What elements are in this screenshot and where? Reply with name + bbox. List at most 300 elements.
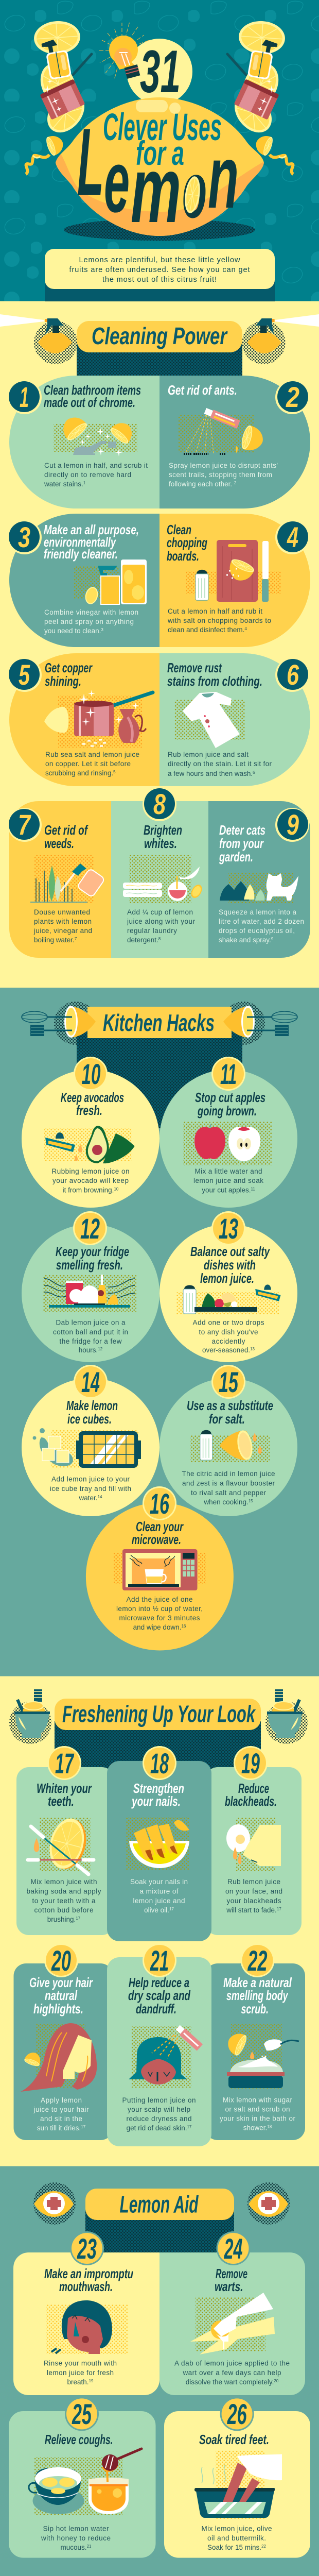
body: tip 23: Rinse your mouth with <box>44 2360 117 2367</box>
heading: 31: 31 <box>140 38 181 105</box>
panel: tip 13 <box>160 1211 297 1362</box>
body: tip 22: or salt and scrub on <box>225 2105 290 2113</box>
number badge 1 <box>8 380 42 414</box>
body: tip 6: 6 <box>253 770 255 775</box>
body: tip 16: 16 <box>181 1624 186 1629</box>
intro text box: Lemons are plentiful, but these little yellow <box>79 256 240 264</box>
heading: tip 11: going brown. <box>197 1103 257 1118</box>
intro text box: the most out of this citrus fruit! <box>102 276 217 284</box>
icon: light bulb <box>98 22 149 80</box>
body: tip 1: 1 <box>83 481 86 485</box>
body: tip 4: clean and disinfect them. <box>168 626 244 634</box>
panel: tip 7 <box>9 801 111 958</box>
body: tip 16: lemon into ½ cup of water, <box>116 1605 203 1613</box>
heading: tip 6: Remove rust <box>167 660 222 675</box>
body: tip 3 <box>44 608 138 635</box>
body: tip 14: ice cube tray and fill with <box>50 1485 131 1493</box>
number badge 5 <box>8 658 42 692</box>
heading: tip 20: natural <box>45 1988 78 2003</box>
number badge 2 <box>275 380 309 414</box>
heading: tip 8: whites. <box>144 836 177 851</box>
illustration: weeds and spray <box>30 855 105 904</box>
heading: tip 4 <box>167 522 207 564</box>
number badge 13 <box>211 1211 245 1245</box>
body: tip 8: regular laundry <box>127 927 177 935</box>
number badge 14 <box>74 1365 108 1399</box>
body: tip 9: litre of water, add 2 dozen <box>219 918 304 925</box>
heading: tip 24 <box>215 2266 247 2294</box>
number badge 22 <box>241 1943 275 1977</box>
body: tip 21 <box>122 2096 196 2132</box>
body: tip 1: water stains. <box>44 480 83 488</box>
heading: tip 1 <box>44 382 141 410</box>
body: tip 26: oil and buttermilk. <box>207 2534 266 2542</box>
body: tip 7: plants with lemon <box>34 918 92 925</box>
heading: tip 18: Strengthen <box>133 1781 184 1796</box>
body: tip 2: scent trails, stopping them from <box>169 471 272 479</box>
body: tip 9 <box>219 908 304 944</box>
body: tip 3: Combine vinegar with lemon <box>44 608 138 616</box>
body: tip 9: Squeeze a lemon into a <box>219 908 296 916</box>
heading: tip 11: Stop cut apples <box>195 1090 265 1105</box>
body: tip 10 <box>51 1167 130 1194</box>
body: tip 19: 17 <box>277 1907 281 1911</box>
panel: tip 3 <box>9 514 160 647</box>
icon: spray beam left <box>0 314 44 327</box>
body: tip 18: a mixture of <box>140 1888 179 1895</box>
body: tip 12: 12 <box>98 1347 103 1351</box>
heading: tip 19: blackheads. <box>225 1793 277 1809</box>
body: tip 20 <box>33 2096 89 2132</box>
heading banner: cleaning power <box>77 321 242 352</box>
body: tip 13: Add one or two drops <box>192 1319 264 1326</box>
body: tip 17: baking soda and apply <box>27 1888 101 1895</box>
body: tip 23: lemon juice for fresh <box>47 2369 114 2377</box>
illustration: scalp with lemon spray <box>129 2024 203 2088</box>
illustration: chopping board, salt and knife <box>186 540 281 602</box>
body: tip 11: lemon juice and soak <box>193 1177 263 1184</box>
illustration: lemon tea and honey <box>29 2449 141 2515</box>
panel: tip 12 <box>22 1211 160 1362</box>
heading: tip 19: Reduce <box>238 1781 269 1796</box>
body: tip 6 <box>168 751 272 777</box>
number badge 7: 7 <box>18 808 31 841</box>
heading: tip 20: highlights. <box>33 2001 83 2016</box>
body: tip 6: Rub lemon juice and salt <box>168 751 249 758</box>
body: tip 12: hours. <box>79 1346 98 1354</box>
illustration: citrus cleaner spray and jar <box>74 560 147 606</box>
heading: tip 21 <box>128 1975 191 2016</box>
body: tip 5: on copper. Let it sit before <box>45 760 131 768</box>
heading banner: kitchen hacks <box>87 1007 232 1038</box>
heading: tip 14: ice cubes. <box>67 1411 112 1427</box>
heading: tip 21: dry scalp and <box>128 1988 191 2003</box>
number badge 16: 16 <box>150 1487 170 1520</box>
panel: tip 23 <box>13 2252 160 2395</box>
panel: tip 15 <box>160 1365 297 1516</box>
body: tip 13 <box>192 1319 264 1354</box>
illustration: salt shaker and lemon <box>190 1429 270 1462</box>
body: tip 5: scrubbing and rinsing. <box>45 769 113 777</box>
halftone circles and lemon eyes <box>33 2182 290 2225</box>
heading: tip 18 <box>131 1781 184 1809</box>
panel: tip 14 <box>22 1365 160 1516</box>
illustration: stained t-shirt <box>174 692 245 748</box>
body: tip 2: 2 <box>234 481 237 485</box>
illustration: apples <box>183 1122 272 1165</box>
panel: tip 17 <box>16 1767 114 1935</box>
number badge 21 <box>143 1943 176 1977</box>
body: tip 15: The citric acid in lemon juice <box>182 1470 275 1478</box>
body: tip 11 <box>193 1167 263 1194</box>
icon: lemon first aid left <box>34 2191 74 2217</box>
number badge 25: 25 <box>72 2398 92 2430</box>
number badge 7 <box>8 808 42 842</box>
intro text box <box>45 249 275 289</box>
body: tip 11: Mix a little water and <box>194 1167 262 1175</box>
number badge 15 <box>211 1365 245 1399</box>
intro box shadow <box>45 258 275 301</box>
icon: lemon spray bottle left <box>34 318 77 364</box>
heading: tip 9: garden. <box>219 849 253 865</box>
title text <box>77 106 239 242</box>
body: tip 25: with honey to reduce <box>41 2534 111 2542</box>
number badge 17: 17 <box>55 1747 75 1780</box>
number badge 11 <box>211 1057 245 1091</box>
body: tip 13: over-seasoned. <box>202 1346 250 1354</box>
shadow under lemon <box>64 219 255 241</box>
illustration: lemon slice and cotton buds <box>28 1815 94 1874</box>
heading: tip 16 <box>132 1519 184 1547</box>
body: tip 19: will start to fade. <box>226 1906 277 1914</box>
body: tip 24 <box>174 2360 290 2386</box>
heading: tip 23: mouthwash. <box>59 2279 113 2294</box>
heading: tip 3 <box>44 522 139 562</box>
heading: tip 9: Deter cats <box>219 822 265 838</box>
body: tip 20: juice to your hair <box>33 2106 89 2113</box>
body: tip 1: directly on to remove hard <box>44 471 131 479</box>
icon: spray beam right <box>275 314 319 327</box>
heading: tip 25: Relieve coughs. <box>45 2432 113 2447</box>
heading: tip 6: stains from clothing. <box>167 673 262 689</box>
number badge 20: 20 <box>51 1944 71 1977</box>
body: tip 18: lemon juice and <box>133 1897 185 1905</box>
heading: tip 3: Make an all purpose, <box>44 522 139 537</box>
number badge 1: 1 <box>20 381 29 413</box>
body: tip 23: 19 <box>89 2379 94 2383</box>
body: tip 21: 17 <box>187 2125 192 2129</box>
icon: mortar, lemon and comb left <box>14 1689 50 1738</box>
banner shadow: freshening <box>55 1721 261 1777</box>
heading: tip 21: dandruff. <box>136 2001 176 2016</box>
body: tip 17: 17 <box>76 1916 81 1921</box>
body: tip 22: 18 <box>267 2125 272 2129</box>
heading: tip 7: weeds. <box>44 836 74 851</box>
illustration: highlighted hair <box>21 2023 97 2092</box>
icon: lemon spray bottle right <box>242 318 286 364</box>
panel: tip 5 <box>9 653 160 786</box>
icon: mortar, lemon and comb right <box>267 1689 303 1738</box>
heading: tip 26: Soak tired feet. <box>199 2432 269 2447</box>
illustration: ice cube tray <box>33 1428 141 1468</box>
heading banner: lemon aid: Lemon Aid <box>119 2191 199 2218</box>
illustration: lemon on nose <box>226 1818 281 1871</box>
illustration: salted plate and squeezer <box>176 1284 281 1314</box>
panel: tip 4 <box>160 514 310 647</box>
body: tip 20: and sit in the <box>40 2115 82 2123</box>
heading: tip 13: dishes with <box>204 1257 256 1273</box>
heading: tip 20 <box>29 1975 93 2016</box>
body: tip 5: 5 <box>113 770 116 774</box>
heading: tip 18: your nails. <box>131 1793 181 1809</box>
heading: tip 16: microwave. <box>132 1532 181 1547</box>
heading: tip 17: teeth. <box>48 1793 74 1809</box>
title text: L <box>77 109 104 215</box>
body: tip 7: juice, vinegar and <box>33 927 92 935</box>
body: tip 26: Mix lemon juice, olive <box>202 2525 272 2533</box>
body: tip 26: Soak for 15 mins. <box>207 2544 261 2551</box>
heading: tip 13: Balance out salty <box>190 1244 270 1259</box>
illustration: right cleaning tools and lemons <box>227 20 293 174</box>
illustration: fridge shelf <box>43 1275 136 1312</box>
heading: tip 1: Clean bathroom items <box>44 382 141 398</box>
heading: tip 4: Clean <box>167 522 191 537</box>
heading: tip 15: Use as a substitute <box>187 1398 273 1413</box>
body: tip 25: 21 <box>87 2544 92 2549</box>
heading: tip 22: scrub. <box>241 2001 269 2016</box>
heading: tip 9: from your <box>219 836 264 851</box>
illustration: giant lemon <box>51 97 268 242</box>
panel: tip 19 <box>205 1767 302 1935</box>
heading: tip 8: Brighten <box>144 822 182 838</box>
body: tip 20: Apply lemon <box>41 2096 82 2104</box>
body: tip 12: Dab lemon juice on a <box>56 1319 126 1326</box>
number badge 2: 2 <box>286 381 299 413</box>
icon: lemon first aid right <box>249 2191 288 2217</box>
body: tip 8: Add ¼ cup of lemon <box>127 908 193 916</box>
body: tip 6: directly on the stain. Let it sit for <box>168 760 272 768</box>
body: tip 8 <box>127 908 196 944</box>
lemon aid background <box>0 2166 319 2576</box>
halftone circles behind kitchen lemons <box>54 1002 265 1045</box>
number badge 3 <box>8 520 42 554</box>
body: tip 15 <box>182 1470 275 1506</box>
body: tip 3: peel and spray on anything <box>44 618 134 625</box>
panel: tip 18 <box>107 1761 211 1941</box>
body: tip 21: Putting lemon juice on <box>122 2096 196 2104</box>
body: tip 25: Sip hot lemon water <box>43 2525 109 2533</box>
body: tip 13: 13 <box>250 1347 255 1351</box>
body: tip 10: your avocado will keep <box>52 1177 129 1184</box>
kitchen hacks background <box>0 988 319 1676</box>
body: tip 22: Mix lemon with sugar <box>223 2096 292 2104</box>
freshening background <box>0 1676 319 2166</box>
body: tip 17: brushing. <box>47 1916 76 1923</box>
heading: tip 12: Keep your fridge <box>56 1244 129 1259</box>
illustration: copper pot and jug <box>44 690 153 748</box>
heading: tip 9 <box>219 822 265 865</box>
panel: tip 16 <box>86 1486 234 1651</box>
body: tip 18 <box>130 1878 188 1914</box>
number badge 14: 14 <box>81 1366 100 1398</box>
heading: tip 7 <box>44 822 88 851</box>
title text: e <box>104 133 130 231</box>
heading: tip 8 <box>144 822 182 851</box>
body: tip 19: on your face, and <box>225 1888 282 1895</box>
header background <box>0 0 319 301</box>
intro text box: fruits are often underused. See how you can get <box>69 266 250 274</box>
number badge 24: 24 <box>224 2232 243 2265</box>
body: tip 16 <box>116 1596 203 1631</box>
heading banner: kitchen hacks: Kitchen Hacks <box>103 1009 215 1036</box>
body: tip 8: detergent. <box>127 936 158 944</box>
heading: tip 14 <box>66 1398 118 1427</box>
body: tip 3: 3 <box>101 628 103 632</box>
number badge 4: 4 <box>287 521 298 553</box>
heading: tip 12 <box>56 1244 129 1273</box>
body: tip 25: mucous. <box>61 2544 87 2551</box>
body: tip 5 <box>45 751 139 777</box>
body: tip 10: Rubbing lemon juice on <box>51 1167 130 1175</box>
panel: tip 26 <box>164 2411 310 2558</box>
heading: tip 4: boards. <box>167 548 199 564</box>
number badge 8: 8 <box>153 788 166 820</box>
heading: tip 15: for salt. <box>209 1411 245 1427</box>
number badge 15: 15 <box>219 1366 239 1398</box>
heading: tip 2: Get rid of ants. <box>168 382 237 398</box>
panel: tip 9 <box>208 801 310 958</box>
panel: tip 20 <box>13 1963 113 2140</box>
number badge 8 <box>143 787 176 821</box>
title text: o <box>182 146 207 234</box>
body: tip 22 <box>220 2096 295 2132</box>
body: tip 13: to any dish you've <box>199 1328 258 1336</box>
body: tip 9: 9 <box>271 937 274 941</box>
banner shadow: kitchen hacks <box>77 1030 242 1128</box>
number badge 5: 5 <box>19 658 30 691</box>
body: tip 4 <box>167 607 271 634</box>
number badge 13: 13 <box>219 1212 238 1245</box>
illustration: lemons and chrome tap <box>54 412 137 456</box>
body: tip 4: 4 <box>244 626 247 631</box>
body: tip 24: wart over a few days can help <box>182 2369 281 2377</box>
heading: tip 7: Get rid of <box>44 822 88 838</box>
number badge 4 <box>275 520 309 554</box>
number badge 26: 26 <box>227 2398 247 2430</box>
number badge 10: 10 <box>81 1058 101 1090</box>
panel: tip 6 <box>160 653 310 786</box>
body: tip 18: Soak your nails in <box>130 1878 188 1886</box>
icon: left lemon, whisk and beater <box>22 1006 96 1038</box>
body: tip 17: cotton bud before <box>34 1906 94 1914</box>
heading: tip 13 <box>190 1244 270 1286</box>
heading: tip 17: Whiten your <box>37 1781 92 1796</box>
heading: tip 24: warts. <box>215 2279 243 2294</box>
heading: tip 10 <box>61 1090 124 1118</box>
title text: for a <box>136 134 184 172</box>
number badge 21: 21 <box>150 1944 169 1977</box>
body: tip 26 <box>202 2525 272 2551</box>
illustration: body scrub bowl <box>224 2024 299 2089</box>
body: tip 7: boiling water. <box>34 936 75 944</box>
panel: tip 2 <box>160 376 310 509</box>
number badge 6 <box>275 658 309 692</box>
number badge 19: 19 <box>241 1747 260 1780</box>
illustration: hands and lemon on wart <box>190 2293 275 2354</box>
number badge 19 <box>234 1746 268 1780</box>
body: tip 3: you need to clean. <box>44 627 101 635</box>
illustration: spray and ants <box>178 407 266 454</box>
heading: tip 5: Get copper <box>45 660 93 675</box>
banner shadow: cleaning power <box>77 343 242 377</box>
body: tip 22: shower. <box>243 2124 267 2132</box>
heading: tip 20: Give your hair <box>29 1975 93 1990</box>
body: tip 13: accidently <box>212 1337 245 1345</box>
body: tip 15: and zest is a flavour booster <box>182 1480 275 1487</box>
heading: tip 21: Help reduce a <box>129 1975 189 1990</box>
body: tip 24: dissolve the wart completely. <box>186 2378 274 2386</box>
body: tip 26: 22 <box>261 2544 267 2549</box>
cleaning power background <box>0 301 319 988</box>
illustration: woman rinsing mouth <box>46 2300 128 2354</box>
number badge 11: 11 <box>220 1058 237 1090</box>
body: tip 21: reduce dryness and <box>127 2115 191 2123</box>
body: tip 7: 7 <box>75 937 77 941</box>
heading: tip 5 <box>45 660 93 689</box>
body: tip 10: 10 <box>114 1187 119 1191</box>
body: tip 22: your skin in the bath or <box>220 2114 295 2123</box>
number badge 3: 3 <box>18 521 30 553</box>
number badge 10 <box>74 1057 108 1091</box>
illustration: left cleaning tools and lemons <box>26 20 92 174</box>
heading: tip 23 <box>44 2266 133 2294</box>
panel: tip 25 <box>9 2411 155 2558</box>
heading: tip 13: lemon juice. <box>200 1270 254 1286</box>
number badge 23 <box>70 2231 104 2265</box>
body: tip 16: Add the juice of one <box>127 1596 192 1603</box>
body: tip 24: 20 <box>274 2379 279 2383</box>
body: tip 18: olive oil. <box>144 1906 169 1914</box>
number badge 26 <box>220 2397 254 2431</box>
body: tip 16: and wipe down. <box>133 1623 181 1631</box>
heading: tip 14: Make lemon <box>66 1398 118 1413</box>
body: tip 8: juice along with your <box>127 918 196 925</box>
body: tip 19: your blackheads <box>226 1897 281 1905</box>
panel: tip 21 <box>107 1957 211 2146</box>
heading: tip 10: fresh. <box>76 1103 102 1118</box>
heading: tip 11 <box>195 1090 265 1118</box>
heading: tip 6 <box>167 660 262 689</box>
number badge 17 <box>47 1746 81 1780</box>
number badge 16 <box>143 1486 176 1520</box>
heading: tip 22: smelling body <box>226 1988 289 2003</box>
heading banner: cleaning power: Cleaning Power <box>92 323 228 349</box>
illustration: foot soak <box>194 2450 282 2519</box>
heading: tip 24: Remove <box>216 2266 247 2281</box>
body: tip 19: Rub lemon juice <box>227 1878 280 1886</box>
title text: Clever Uses <box>103 106 222 148</box>
body: tip 12 <box>53 1319 128 1354</box>
body: tip 21: get rid of dead skin. <box>127 2124 187 2132</box>
heading: tip 5: shining. <box>45 673 81 689</box>
body: tip 12: the fridge for a few <box>60 1337 122 1345</box>
number badge 12: 12 <box>80 1212 100 1245</box>
heading banner: freshening up your look <box>55 1699 261 1730</box>
heading: tip 22: Make a natural <box>223 1975 292 1990</box>
panel: tip 1 <box>9 376 160 509</box>
heading: tip 1: made out of chrome. <box>44 395 135 410</box>
body: tip 6: a few hours and then wash. <box>168 770 253 777</box>
